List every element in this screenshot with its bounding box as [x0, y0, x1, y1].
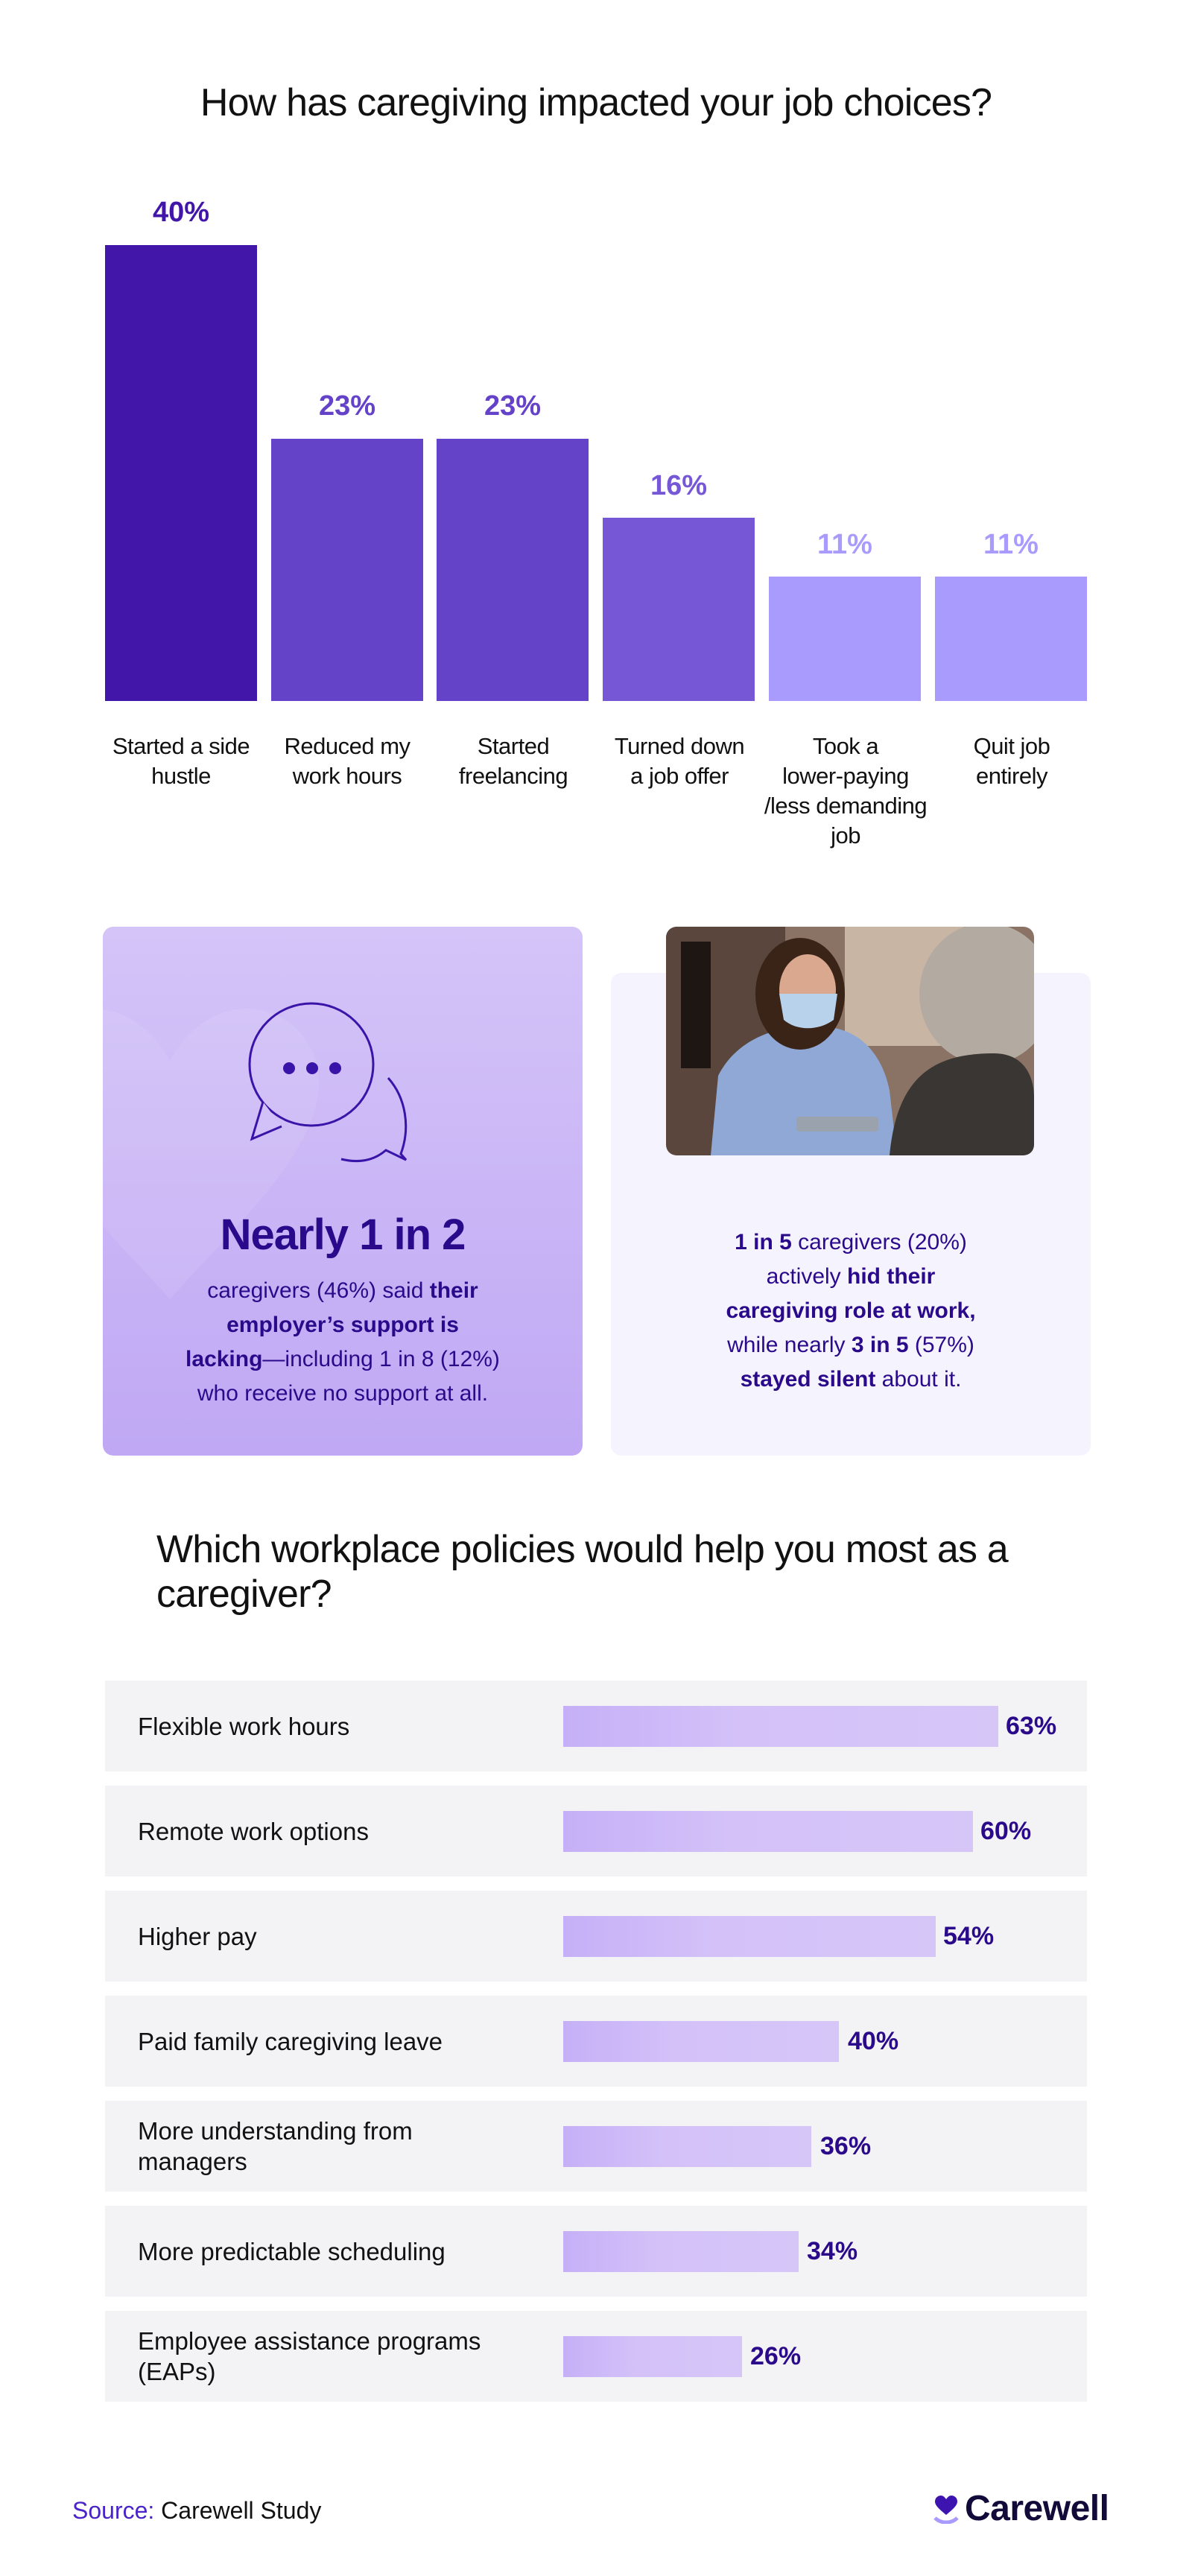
row: flexible hours: [105, 1681, 1087, 1771]
text: hid caregiving role: caregiving role at work,: [726, 1298, 976, 1323]
bar: quit: 11%: [983, 529, 1039, 560]
bar labels: lower-paying: [782, 763, 909, 789]
bar labels: Reduced my: [284, 733, 410, 759]
bar: turned down offer: 16%: [650, 470, 707, 501]
source: Source: Carewell Study: [72, 2497, 321, 2524]
chart: workplace policies: [105, 1681, 1087, 2402]
row: EAPs: Employee assistance programs: [138, 2327, 481, 2355]
row: EAPs: (EAPs): [138, 2358, 216, 2385]
decorative heart: [13, 986, 326, 1314]
row: remote work: [105, 1786, 1087, 1877]
bar: lower-paying: 11%: [817, 529, 872, 560]
row: paid leave: [105, 1996, 1087, 2087]
text: employer support: lacking—including 1 in 8 (12%): [186, 1347, 500, 1371]
row: EAPs: 26%: [750, 2342, 801, 2370]
row: EAPs: [105, 2311, 1087, 2402]
stat: nearly 1 in 2: Nearly 1 in 2: [221, 1211, 465, 1259]
row: scheduling: [105, 2206, 1087, 2297]
row: scheduling: 34%: [807, 2237, 857, 2265]
bar labels: hustle: [151, 763, 211, 789]
row: paid leave: 40%: [848, 2027, 898, 2055]
row: managers: More understanding from: [138, 2117, 413, 2145]
text: hid caregiving role: while nearly 3 in 5 (57%): [727, 1333, 974, 1357]
bar: freelancing: 23%: [484, 390, 541, 422]
bar labels: /less demanding: [764, 793, 927, 819]
text: employer support: [186, 1278, 500, 1406]
text: employer support: caregivers (46%) said their: [207, 1278, 478, 1303]
bar labels: Started a side: [112, 733, 250, 759]
row: flexible hours: 63%: [1006, 1712, 1056, 1740]
bar labels: freelancing: [459, 763, 568, 789]
bar labels: job: [831, 822, 860, 848]
photo: nurse with patient: [666, 927, 1034, 1155]
row: remote work: 60%: [980, 1817, 1031, 1845]
row: managers: [105, 2101, 1087, 2192]
bar: side hustle: 40%: [153, 197, 209, 228]
text: hid caregiving role: actively hid their: [767, 1264, 935, 1289]
row: managers: managers: [138, 2148, 247, 2175]
bar labels: Quit job: [974, 733, 1050, 759]
row: paid leave: Paid family caregiving leave: [138, 2028, 443, 2055]
icon: chat bubbles: [249, 1003, 407, 1162]
text: employer support: employer’s support is: [226, 1313, 459, 1337]
title: workplace policies: [156, 1528, 1009, 1616]
text: hid caregiving role: stayed silent about it.: [741, 1367, 961, 1392]
bar labels: a job offer: [630, 763, 729, 789]
bar labels: Turned down: [615, 733, 744, 759]
row: scheduling: More predictable scheduling: [138, 2238, 446, 2265]
row: higher pay: [105, 1891, 1087, 1982]
panel: employer support: [103, 927, 583, 1456]
title: workplace policies: caregiver?: [156, 1573, 332, 1616]
row: managers: 36%: [820, 2132, 871, 2160]
text: hid caregiving role: 1 in 5 caregivers (20%): [735, 1230, 967, 1254]
logo: Carewell: Carewell: [965, 2489, 1109, 2528]
bar labels: entirely: [976, 763, 1047, 789]
bar labels: work hours: [293, 763, 402, 789]
text: hid caregiving role: [726, 1230, 976, 1392]
title: workplace policies: Which workplace policies would help you most as a: [156, 1528, 1008, 1571]
bar chart: job choices: [105, 197, 1087, 701]
bar labels: Took a: [813, 733, 878, 759]
row: higher pay: 54%: [943, 1922, 994, 1950]
row: flexible hours: Flexible work hours: [138, 1712, 349, 1740]
row: remote work: Remote work options: [138, 1818, 369, 1844]
row: higher pay: Higher pay: [138, 1922, 257, 1950]
panel: hid caregiving role: [611, 973, 1091, 1456]
bar labels: Started: [478, 733, 549, 759]
bar labels: [112, 733, 1050, 848]
bar: reduced hours: 23%: [319, 390, 375, 422]
text: employer support: who receive no support at all.: [197, 1381, 488, 1406]
title: job choices: How has caregiving impacted your job choices?: [200, 81, 992, 124]
